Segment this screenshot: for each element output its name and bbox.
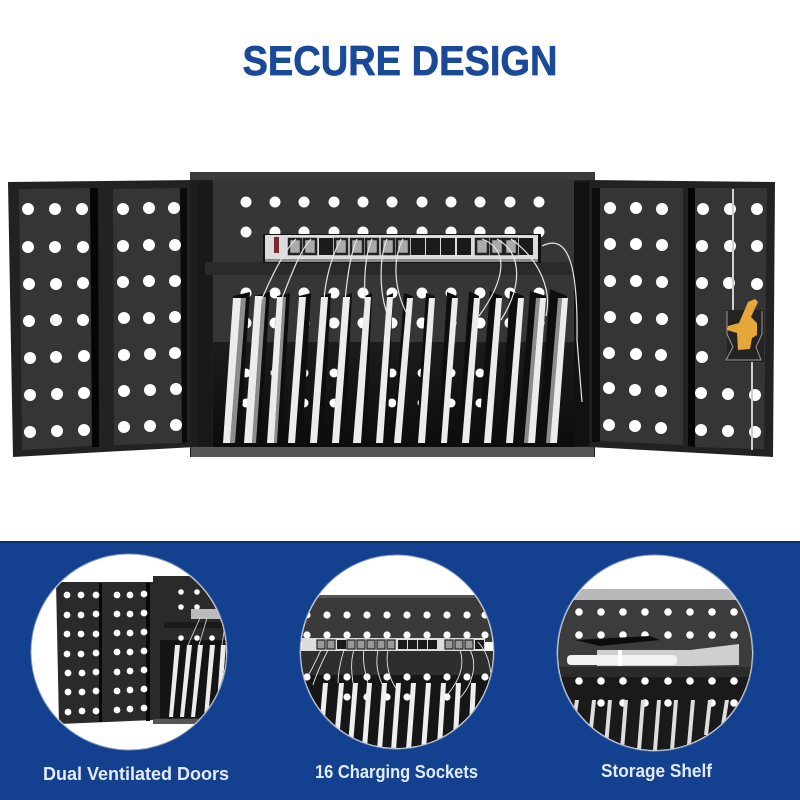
locking rods <box>732 189 753 450</box>
feature: dual ventilated doors <box>31 554 234 784</box>
charging cables <box>261 239 582 402</box>
yellow latch <box>726 299 764 362</box>
label: 16 Charging Sockets <box>315 762 478 782</box>
blue feature band <box>0 541 800 800</box>
feature: 16 charging sockets <box>295 555 500 782</box>
silver tablet sides <box>230 297 562 443</box>
power switch <box>274 237 279 253</box>
circle photo: sockets <box>295 555 500 755</box>
label: Storage Shelf <box>601 761 713 781</box>
feature: storage shelf <box>555 555 755 781</box>
stored cable and power strip <box>567 644 739 666</box>
title: SECURE DESIGN <box>242 37 558 84</box>
circle photo: shelf <box>555 555 755 757</box>
label: Dual Ventilated Doors <box>43 764 229 784</box>
tablets <box>223 289 568 444</box>
power strip with 16 sockets <box>263 234 541 263</box>
left door <box>8 180 195 457</box>
product: open charging cabinet <box>0 172 800 800</box>
circle photo: doors <box>31 554 234 750</box>
cabinet body <box>190 172 595 457</box>
right door <box>590 180 775 457</box>
shelf <box>205 262 574 275</box>
